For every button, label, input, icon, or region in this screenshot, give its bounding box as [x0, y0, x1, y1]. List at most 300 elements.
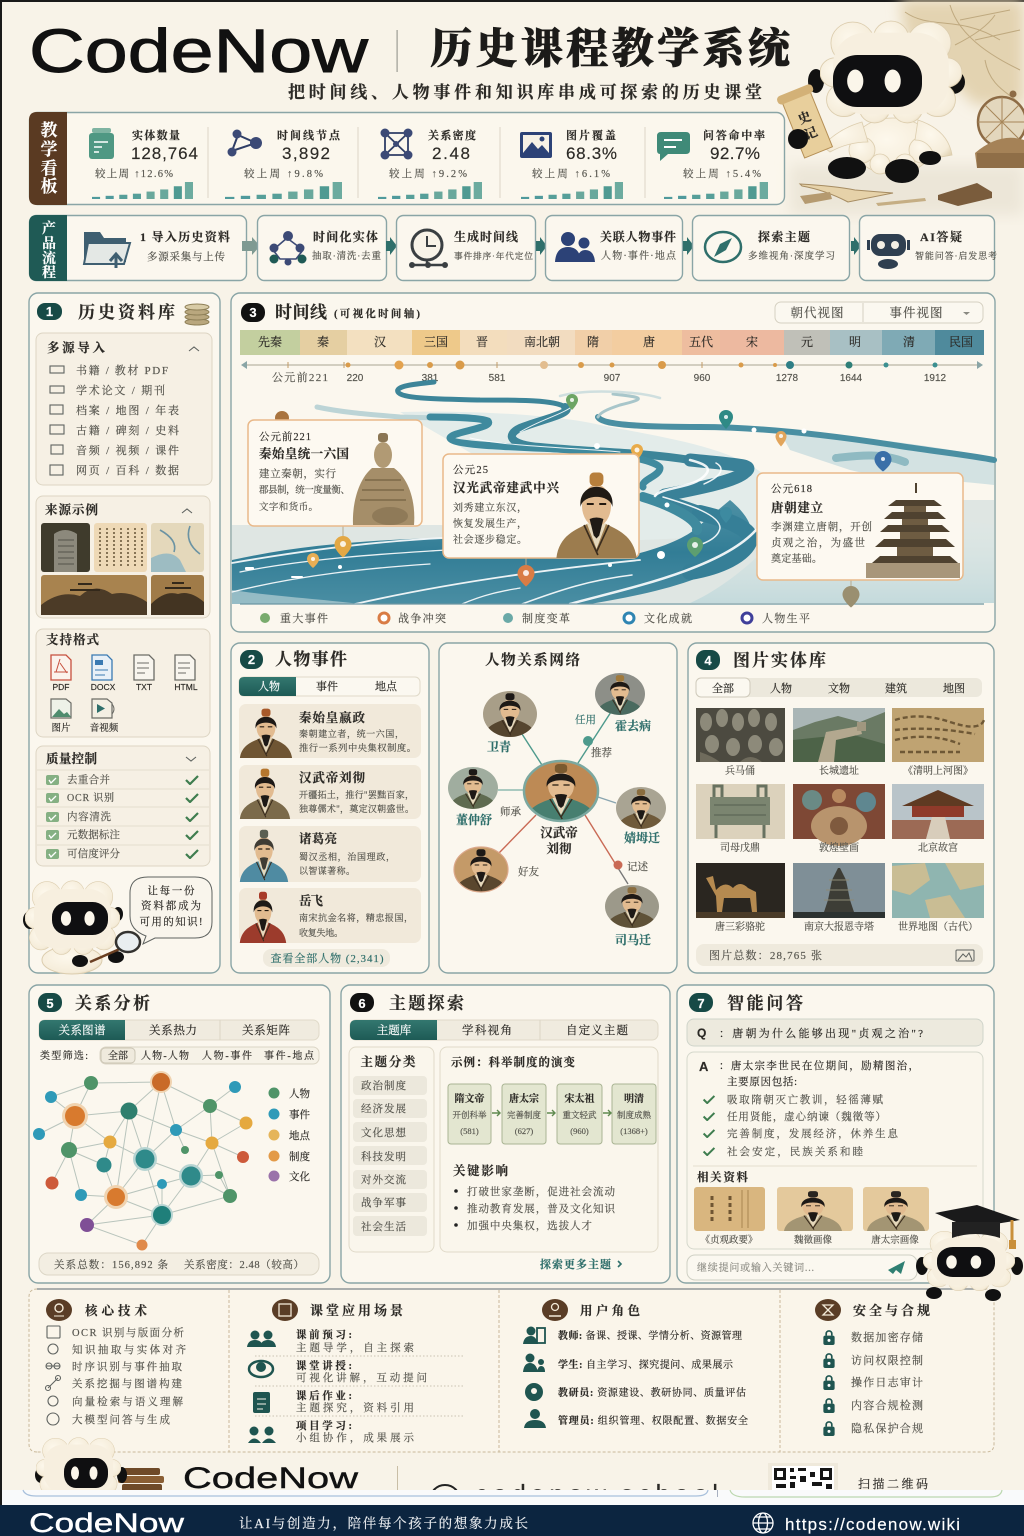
network labels: 刘彻	[546, 841, 572, 856]
network labels: 董仲舒	[456, 812, 492, 827]
mascot: footer	[35, 1438, 127, 1498]
tabs	[39, 1020, 319, 1040]
dynasty bar: 晋	[476, 335, 488, 349]
metric: qa hit rate: 92.7%	[710, 144, 760, 163]
person: zhuge liang: 诸葛亮	[299, 831, 337, 846]
heading: 4	[704, 653, 712, 668]
heading: 历史资料库	[78, 302, 175, 322]
icon: audio video	[90, 699, 119, 734]
question: ：唐朝为什么能够出现"贞观之治"?	[719, 1026, 923, 1040]
timeline axis: 960	[694, 373, 711, 384]
column: scenarios: 项目学习:	[296, 1419, 352, 1432]
metric: qa hit rate: 较上周 ↑5.4%	[683, 167, 761, 180]
image: forbidden city	[892, 784, 984, 854]
metric: image coverage: 较上周 ↑6.1%	[532, 167, 610, 180]
footer upper band	[35, 1438, 928, 1515]
column: scenarios: 课堂讲授:	[296, 1359, 352, 1372]
event card: guangwu: 汉光武帝建武中兴	[453, 480, 560, 495]
network labels: 记述	[627, 860, 648, 873]
evolution steps: (627)	[515, 1126, 533, 1136]
event card: qin: 建立秦朝，实行	[259, 467, 336, 480]
image: ding vessel: 司母戊鼎	[720, 841, 760, 854]
person: zhuge liang	[239, 826, 421, 882]
example card: 打破世家垄断，促进社会流动	[467, 1185, 616, 1198]
event card: qin: 郡县制，统一度量衡、	[259, 484, 350, 496]
image: dunhuang mural: 敦煌壁画	[819, 841, 859, 854]
event card: guangwu	[443, 454, 639, 558]
panel 6: topic explore	[341, 985, 670, 1283]
answer card	[687, 1052, 983, 1249]
network title: 人物关系网络	[485, 651, 580, 669]
dashboard tab: 板	[40, 176, 58, 196]
tabs: 自定义主题	[566, 1023, 628, 1037]
topic list: 战争军事	[361, 1196, 406, 1209]
scan text: 扫描二维码	[858, 1476, 928, 1491]
quality card: 内容清洗	[67, 810, 112, 823]
icon: pdf: PDF	[52, 682, 70, 692]
timeline axis: 1278	[776, 373, 799, 384]
image: baoen pagoda: 南京大报恩寺塔	[804, 920, 874, 933]
view toggle: 事件视图	[890, 305, 942, 320]
tabs: 关系矩阵	[242, 1023, 290, 1037]
view all people: 查看全部人物 (2,341)	[270, 951, 384, 965]
event card: qin: 公元前221	[259, 430, 311, 443]
heading	[37, 302, 175, 322]
network labels: 师承	[500, 805, 521, 818]
evolution steps: 宋太祖	[564, 1092, 594, 1105]
column: roles: 学生: 自主学习、探究提问、成果展示	[558, 1358, 734, 1371]
subtitle: 把时间线、人物事件和知识库串成可探索的历史课堂	[288, 82, 762, 102]
tabs: 文物	[828, 681, 850, 695]
graph legend: 人物	[289, 1087, 310, 1100]
column: core tech: 时序识别与事件抽取	[72, 1360, 182, 1373]
mascot: main with scroll	[776, 21, 965, 183]
event card: guangwu: 公元25	[453, 464, 488, 476]
tabs: 人物	[258, 679, 280, 693]
step 3: timeline: 事件排序·年代定位	[454, 250, 533, 261]
answer card: 完善制度，发展经济，休养生息	[727, 1127, 898, 1140]
evolution steps: 重文轻武	[562, 1110, 597, 1120]
answer card: 主要原因包括:	[727, 1075, 797, 1088]
icon: html: HTML	[174, 682, 198, 692]
step 3: timeline: 生成时间线	[454, 229, 518, 244]
dynasty bar: 汉	[374, 335, 386, 349]
event card: qin: 文字和货币。	[259, 501, 318, 513]
image: terracotta army	[696, 708, 785, 777]
filter: 类型筛选:	[40, 1049, 88, 1062]
river illustration	[232, 382, 994, 604]
column: roles: 用户角色	[580, 1303, 640, 1318]
step 1: import: 多源采集与上传	[147, 250, 226, 263]
quality card: 可信度评分	[67, 847, 120, 860]
event card: tang: 贞观之治，为盛世	[771, 536, 866, 549]
timeline legend: 重大事件	[280, 611, 328, 625]
filter	[40, 1047, 319, 1064]
answer card: 任用贤能，虚心纳谏（魏徵等）	[727, 1110, 886, 1123]
image: terracotta army: 兵马俑	[725, 764, 755, 777]
filter: 事件-地点	[264, 1049, 315, 1062]
network labels	[456, 713, 660, 947]
metric: entities: 128,764	[131, 144, 198, 163]
person: yue fei: 收复失地。	[299, 927, 343, 938]
column: security: 访问权限控制	[851, 1353, 923, 1367]
image: dunhuang mural	[793, 784, 885, 854]
column: core tech: 向量检索与语义理解	[72, 1395, 184, 1408]
heading: (可视化时间轴)	[334, 307, 420, 320]
heading: 7	[697, 996, 705, 1011]
column: core tech: 关系挖掘与图谱构建	[72, 1377, 182, 1390]
column: core tech: 核心技术	[85, 1303, 147, 1318]
source sample card	[36, 496, 210, 618]
quality card: 去重合并	[67, 773, 110, 786]
icon: docx	[91, 655, 116, 692]
qr code	[768, 1463, 838, 1503]
answer card: A	[699, 1059, 709, 1074]
dynasty bar: 三国	[424, 335, 448, 349]
dynasty bar: 唐	[643, 334, 655, 349]
heading	[696, 650, 826, 670]
timeline axis: 581	[489, 373, 506, 384]
scroll: shiji	[776, 83, 836, 159]
heading: 1	[46, 304, 53, 319]
person: han wudi	[239, 765, 421, 819]
scroll: shiji: 史	[796, 108, 813, 127]
topic list: 经济发展	[361, 1102, 406, 1115]
metric: image coverage: 图片覆盖	[566, 128, 616, 142]
person: qin shihuang	[239, 704, 421, 758]
dynasty bar	[240, 330, 984, 355]
quality card: 质量控制	[46, 751, 97, 766]
heading: 5	[46, 996, 54, 1011]
metric: density	[378, 128, 482, 199]
question	[687, 1019, 983, 1046]
image: baoen pagoda	[793, 863, 885, 933]
tabs: 全部	[712, 681, 734, 695]
step 2: entities: 抽取·清洗·去重	[312, 250, 381, 262]
event card: tang: 公元618	[771, 483, 812, 495]
network labels: 婧坶迁	[624, 830, 660, 845]
topic list: 对外交流	[361, 1173, 406, 1186]
icon: image: 图片	[51, 722, 71, 734]
person: zhuge liang: 以智谋著称。	[299, 865, 355, 876]
heading: 智能问答	[727, 993, 803, 1013]
multi-source card	[36, 333, 212, 485]
example card: 关键影响	[453, 1163, 508, 1178]
answer card: 社会安定，民族关系和睦	[727, 1145, 864, 1158]
step 4: linking: 人物·事件·地点	[601, 249, 677, 262]
formats card: 支持格式	[46, 632, 99, 647]
tabs: 主题库	[377, 1023, 412, 1037]
heading: 2	[248, 652, 255, 667]
map texture background	[790, 0, 1024, 215]
heading: 图片实体库	[733, 650, 826, 670]
node: sima qian	[605, 885, 659, 928]
mascot with graduation cap	[916, 1205, 1023, 1301]
timeline axis: 220	[347, 373, 364, 384]
stats pill: 关系总数：156,892 条	[54, 1258, 168, 1271]
dynasty bar: 宋	[746, 335, 758, 349]
multi-source card: 档案 / 地图 / 年表	[76, 403, 179, 417]
arrow	[386, 237, 397, 255]
metric: timeline nodes: 较上周 ↑9.8%	[244, 167, 323, 180]
icon: image	[51, 699, 71, 734]
footer bar	[0, 1505, 1024, 1536]
tabs: 关系图谱	[58, 1023, 106, 1037]
column: security: 隐私保护合规	[851, 1421, 923, 1435]
evolution steps: 开创科举	[452, 1110, 487, 1120]
metric: density: 较上周 ↑9.2%	[389, 167, 467, 180]
topic list	[349, 1047, 434, 1252]
node: center han wudi	[524, 761, 598, 821]
column: security: 操作日志审计	[851, 1375, 923, 1389]
figure: emperor guangwu	[556, 472, 637, 558]
tagline: 让AI与创造力，陪伴每个孩子的想象力成长	[239, 1515, 528, 1532]
timeline axis: 907	[604, 373, 621, 384]
map pins	[275, 394, 892, 608]
event card: tang: 李渊建立唐朝，开创	[771, 520, 872, 533]
step 5: explore: 探索主题	[758, 229, 810, 244]
heading	[240, 649, 347, 669]
related: tang taizong	[863, 1187, 929, 1246]
step 3: timeline	[396, 216, 536, 280]
source sample card: 来源示例	[45, 502, 98, 517]
event card: tang	[757, 473, 963, 580]
dynasty bar: 五代	[689, 335, 713, 349]
evolution steps: 唐太宗	[509, 1092, 540, 1105]
node: huo qubing	[595, 673, 645, 715]
column: core tech: 知识抽取与实体对齐	[72, 1343, 186, 1356]
step 1: import: 品	[42, 236, 56, 252]
image: tang camel: 唐三彩骆驼	[715, 920, 765, 933]
column: security: 数据加密存储	[851, 1330, 923, 1344]
sample: landscape wide	[41, 575, 147, 615]
column: scenarios: 可视化讲解，互动提问	[296, 1371, 427, 1384]
explore more link: 探索更多主题	[540, 1257, 611, 1271]
dashboard tab: 学	[40, 140, 58, 159]
tabs	[239, 677, 420, 696]
tabs	[350, 1020, 658, 1040]
timeline axis: 381	[422, 373, 439, 384]
ask input: 继续提问或输入关键词...	[697, 1261, 814, 1274]
metric: entities	[89, 128, 198, 199]
step 6: ai qa	[860, 216, 997, 280]
image: world map: 世界地图（古代）	[898, 920, 978, 933]
heading: 3	[249, 305, 257, 320]
related: zhenguan zhengyao	[694, 1187, 765, 1246]
column: core tech: OCR 识别与版面分析	[72, 1326, 184, 1339]
dynasty bar: 南北朝	[524, 334, 560, 349]
column: roles	[523, 1299, 748, 1428]
evolution steps: 明清	[624, 1092, 644, 1105]
metric: qa hit rate: 问答命中率	[703, 128, 766, 142]
tabs	[696, 678, 982, 697]
evolution steps: (581)	[460, 1126, 479, 1136]
heading: 关系分析	[75, 993, 150, 1013]
icon: txt: TXT	[136, 682, 152, 692]
timeline legend: 制度变革	[522, 611, 570, 625]
speech bubble	[130, 877, 212, 944]
timeline legend: 人物生平	[762, 611, 810, 625]
step 6: ai qa: AI答疑	[920, 229, 962, 244]
graph legend: 制度	[289, 1150, 310, 1163]
timeline axis	[241, 360, 983, 384]
network links	[498, 712, 628, 884]
step 4: linking: 关联人物事件	[600, 229, 676, 244]
multi-source card: 音频 / 视频 / 课件	[76, 443, 179, 457]
timeline axis: 公元前221	[272, 370, 328, 384]
stats pill	[39, 1253, 319, 1275]
network labels: 汉武帝	[540, 825, 578, 840]
related: tang taizong: 唐太宗画像	[871, 1234, 919, 1246]
evolution steps: 隋文帝	[454, 1092, 484, 1105]
icon: audio video: 音视频	[90, 722, 119, 734]
column: security	[815, 1299, 930, 1436]
node: weiqing	[483, 691, 537, 737]
view toggle	[775, 302, 983, 323]
tabs: 人物	[770, 681, 792, 695]
scroll: shiji: 记	[802, 124, 820, 143]
person: yue fei: 南宋抗金名将，精忠报国，	[299, 912, 413, 924]
dashboard tab: 看	[40, 159, 58, 178]
column: core tech: 大模型问答与生成	[72, 1413, 170, 1426]
topic list: 科技发明	[361, 1150, 406, 1163]
example card: 示例：科举制度的演变	[451, 1055, 576, 1069]
icon: stack	[185, 304, 209, 325]
metric: density: 关系密度	[428, 128, 476, 142]
column: roles: 教研员: 资源建设、教研协同、质量评估	[558, 1386, 746, 1399]
question: Q	[697, 1026, 706, 1040]
event card: tang: 奠定基础。	[771, 552, 822, 565]
image total footer	[696, 944, 983, 966]
tabs: 地点	[375, 679, 398, 693]
metric: entities: 较上周 ↑12.6%	[95, 167, 173, 180]
panel: dashboard	[29, 112, 784, 205]
person: han wudi: 独尊儒术"，奠定汉朝盛世。	[299, 803, 414, 815]
metric: timeline nodes: 3,892	[282, 144, 330, 163]
image: qingming scroll	[892, 708, 984, 777]
step 1: import	[29, 215, 246, 281]
evolution steps	[448, 1084, 656, 1144]
related: weizheng: 魏徵画像	[794, 1234, 832, 1246]
panel: product flow	[29, 215, 997, 281]
tabs: 建筑	[885, 681, 907, 695]
footer logo: CodeNow	[183, 1462, 358, 1495]
heading	[241, 303, 420, 322]
title: 历史课程教学系统	[430, 26, 794, 73]
sample: manuscript	[94, 523, 147, 572]
partial website: codenow.school	[475, 1479, 718, 1509]
metric: density: 2.48	[432, 144, 470, 163]
heading: 时间线	[275, 303, 327, 322]
metric: image coverage: 68.3%	[566, 144, 617, 163]
stats pill: 关系密度：2.48（较高）	[184, 1258, 304, 1271]
heading: 主题探索	[389, 993, 464, 1013]
node: friend	[454, 847, 508, 892]
answer card: ：唐太宗李世民在位期间，励精图治，	[719, 1059, 919, 1072]
column: scenarios: 主题导学，自主探索	[296, 1341, 414, 1354]
graph legend: 文化	[289, 1170, 310, 1183]
person: yue fei	[239, 888, 421, 943]
graph legend	[268, 1087, 310, 1183]
heading	[350, 993, 464, 1013]
mascot with magnifier	[23, 881, 140, 974]
figure: terracotta warrior	[353, 433, 414, 525]
quality card: OCR 识别	[67, 791, 114, 804]
arrow	[242, 237, 260, 255]
node: dong zhongshu	[448, 767, 498, 809]
books decoration	[118, 1468, 164, 1492]
network graph	[33, 1071, 252, 1250]
quality card	[36, 746, 210, 866]
arrow	[536, 237, 547, 255]
timeline legend: 战争冲突	[398, 611, 446, 625]
tabs: 学科视角	[462, 1023, 512, 1037]
column: roles: 教师: 备课、授课、学情分析、资源管理	[558, 1329, 742, 1342]
column: security: 内容合规检测	[851, 1398, 923, 1412]
example card: 推动教育发展，普及文化知识	[467, 1202, 616, 1215]
related: weizheng	[777, 1187, 853, 1246]
network labels: 推荐	[591, 746, 612, 759]
metric: timeline nodes	[225, 128, 342, 199]
column: scenarios: 课后作业:	[296, 1389, 352, 1402]
website url: https://codenow.wiki	[785, 1515, 960, 1534]
person: yue fei: 岳飞	[299, 893, 323, 908]
dynasty bar: 明	[849, 335, 861, 349]
white strip	[2, 1490, 1024, 1505]
image total footer: 图片总数：28,765 张	[709, 948, 822, 962]
image: qingming scroll: 《清明上河图》	[903, 764, 973, 777]
topic list: 社会生活	[361, 1220, 406, 1233]
person: han wudi: 开疆拓土，推行"罢黜百家，	[299, 789, 414, 801]
person: zhuge liang: 蜀汉丞相，治国理政，	[299, 851, 395, 863]
column: scenarios: 小组协作，成果展示	[296, 1431, 414, 1444]
network labels: 好友	[518, 865, 539, 878]
related: zhenguan zhengyao: 《贞观政要》	[700, 1234, 758, 1246]
evolution steps: 完善制度	[507, 1110, 541, 1120]
panel: bottom info	[29, 1289, 994, 1452]
panel 7: smart qa	[677, 985, 994, 1283]
event card: tang: 唐朝建立	[771, 500, 823, 515]
graph legend: 地点	[289, 1129, 310, 1142]
step 1: import: 1 导入历史资料	[140, 229, 230, 244]
evolution steps: 制度成熟	[617, 1110, 651, 1120]
step 2: entities: 时间化实体	[313, 229, 378, 244]
filter: 人物-事件	[202, 1049, 252, 1062]
step 6: ai qa: 智能问答·启发思考	[915, 250, 997, 261]
multi-source card: 书籍 / 教材 PDF	[76, 363, 168, 377]
logo: CodeNow	[29, 17, 369, 85]
speech bubble: 让每一份	[148, 884, 195, 897]
image: forbidden city: 北京故宫	[918, 841, 958, 854]
view all people	[263, 949, 390, 967]
panel 2: people and events	[231, 643, 429, 973]
person: han wudi: 汉武帝刘彻	[299, 770, 365, 785]
panel 3: timeline	[231, 293, 995, 632]
speech bubble: 可用的知识!	[140, 916, 202, 928]
timeline axis: 1912	[924, 373, 947, 384]
dashboard tab	[40, 121, 58, 196]
multi-source card: 古籍 / 碑刻 / 史料	[76, 423, 179, 437]
event card: qin: 秦始皇统一六国	[259, 446, 349, 461]
step 1: import: 流	[42, 250, 57, 267]
column: core tech	[46, 1299, 186, 1426]
heading	[689, 993, 803, 1013]
evolution steps: (960)	[570, 1126, 589, 1136]
event card: guangwu: 刘秀建立东汉，	[453, 501, 527, 514]
example card	[440, 1047, 658, 1252]
network labels: 卫青	[487, 739, 511, 754]
ask input	[687, 1255, 917, 1280]
